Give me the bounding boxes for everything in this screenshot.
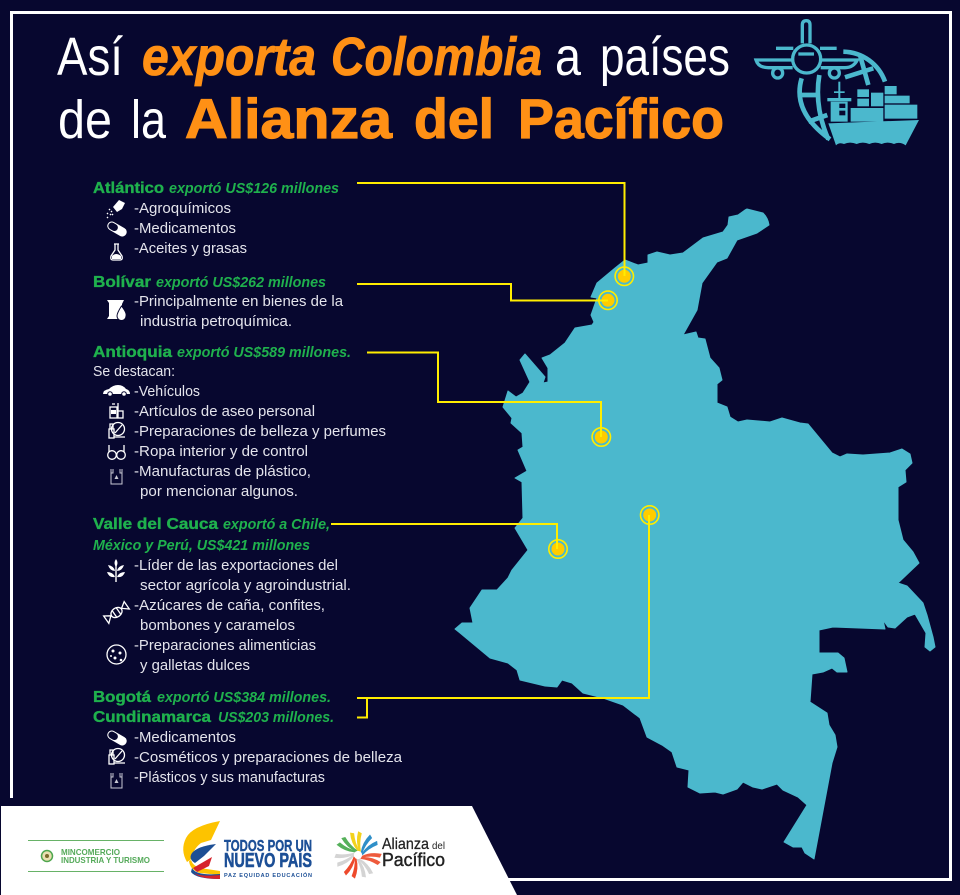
panel: Bogotá and Cundinamarca: Bogotá bbox=[93, 689, 151, 706]
icon: toiletries bbox=[110, 403, 123, 418]
icon: cookie bbox=[107, 645, 126, 664]
title: Pacífico bbox=[518, 87, 724, 150]
panel: Bogotá and Cundinamarca: US$203 millones. bbox=[218, 709, 334, 726]
marker: Bogotá bbox=[640, 506, 659, 524]
logo: Alianza del Pacífico: del bbox=[432, 840, 445, 852]
panel: Atlántico: -Medicamentos bbox=[134, 220, 236, 237]
panel: Bolívar: industria petroquímica. bbox=[140, 313, 292, 330]
panel: Bogotá and Cundinamarca: -Cosméticos y preparaciones de belleza bbox=[134, 749, 403, 766]
panel: Valle del Cauca: bombones y caramelos bbox=[140, 617, 295, 634]
icon: beauty products bbox=[109, 422, 125, 438]
logo: Alianza del Pacífico: Alianza bbox=[382, 836, 429, 853]
panel: Antioquia: -Vehículos bbox=[134, 383, 200, 400]
title: exporta bbox=[142, 27, 316, 87]
panel: Bolívar: -Principalmente en bienes de la bbox=[134, 293, 344, 310]
icon: barrel and drop bbox=[107, 300, 126, 320]
panel: Atlántico: Atlántico bbox=[93, 180, 164, 197]
connector: Bolívar bbox=[357, 284, 608, 300]
icon: car bbox=[103, 385, 130, 396]
footer panel bbox=[1, 806, 517, 895]
icon: plant bbox=[107, 559, 125, 582]
panel: Bolívar: Bolívar bbox=[93, 274, 151, 291]
icon: plane and cargo ship over globe bbox=[756, 21, 919, 145]
title: de bbox=[58, 90, 112, 150]
title: a bbox=[555, 27, 582, 87]
panel: Valle del Cauca bbox=[93, 516, 351, 674]
panel: Antioquia: -Artículos de aseo personal bbox=[134, 403, 315, 420]
icon: candy bbox=[104, 602, 129, 623]
panel: Atlántico: -Agroquímicos bbox=[134, 200, 231, 217]
panel: Antioquia: -Preparaciones de belleza y perfumes bbox=[134, 423, 386, 440]
panel: Valle del Cauca: y galletas dulces bbox=[140, 657, 250, 674]
marker: Atlántico bbox=[615, 267, 634, 285]
title: Así bbox=[57, 27, 123, 87]
panel: Bogotá and Cundinamarca bbox=[93, 689, 403, 788]
panel: Atlántico: -Aceites y grasas bbox=[134, 240, 247, 257]
panel: Antioquia: -Ropa interior y de control bbox=[134, 443, 308, 460]
title: países bbox=[600, 27, 730, 87]
panel: Bogotá and Cundinamarca: Cundinamarca bbox=[93, 709, 211, 726]
panel: Antioquia: -Manufacturas de plástico, bbox=[134, 463, 311, 480]
panel: Bogotá and Cundinamarca: exportó US$384 millones. bbox=[157, 689, 331, 706]
panel: Bolívar: exportó US$262 millones bbox=[156, 274, 326, 291]
title bbox=[57, 27, 730, 150]
panel: Antioquia: por mencionar algunos. bbox=[140, 483, 298, 500]
title: Alianza bbox=[185, 87, 393, 150]
marker: Antioquia bbox=[592, 428, 610, 446]
logo: Todos por un nuevo país bbox=[183, 821, 312, 879]
connector: Antioquia bbox=[367, 352, 601, 437]
panel: Valle del Cauca: -Líder de las exportaciones del bbox=[134, 557, 338, 574]
icon: beauty products bbox=[109, 748, 125, 764]
marker: Valle del Cauca bbox=[549, 540, 567, 558]
panel: Atlántico: exportó US$126 millones bbox=[169, 180, 339, 197]
panel: Atlántico bbox=[93, 180, 339, 260]
icon: oil flask bbox=[111, 244, 122, 260]
panel: Valle del Cauca: exportó a Chile, bbox=[223, 516, 330, 533]
logo: Todos por un nuevo país: PAZ EQUIDAD EDUCACIÓN bbox=[224, 871, 312, 879]
panel: Bogotá and Cundinamarca: -Plásticos y sus manufacturas bbox=[134, 769, 325, 786]
panel: Valle del Cauca: Valle del Cauca bbox=[93, 516, 218, 533]
panel: Valle del Cauca: sector agrícola y agroindustrial. bbox=[140, 577, 351, 594]
title: Colombia bbox=[331, 27, 542, 87]
panel: Antioquia bbox=[93, 344, 386, 500]
panel: Antioquia: Se destacan: bbox=[93, 363, 175, 380]
panel: Antioquia: exportó US$589 millones. bbox=[177, 344, 351, 361]
icon: capsule bbox=[106, 729, 128, 747]
icon: agrochemical spray bbox=[107, 200, 125, 218]
title: la bbox=[131, 90, 167, 150]
connector: Atlántico bbox=[357, 183, 624, 276]
icon: underwear bbox=[108, 445, 125, 459]
icon: plastic bag bbox=[111, 773, 122, 788]
title: del bbox=[414, 87, 494, 150]
connector: Bogotá and Cundinamarca bbox=[357, 515, 649, 718]
panel: Antioquia: Antioquia bbox=[93, 344, 172, 361]
marker: Bolívar bbox=[599, 291, 617, 309]
logo: Mincomercio bbox=[28, 840, 164, 872]
panel: Valle del Cauca: -Azúcares de caña, confites, bbox=[134, 597, 325, 614]
logo: Todos por un nuevo país: TODOS POR UN bbox=[224, 838, 312, 855]
connector: Valle del Cauca bbox=[331, 524, 557, 549]
panel: Valle del Cauca: -Preparaciones alimenticias bbox=[134, 637, 316, 654]
logo: Mincomercio: INDUSTRIA Y TURISMO bbox=[61, 855, 150, 865]
panel: Valle del Cauca: México y Perú, US$421 millones bbox=[93, 537, 310, 554]
logo: Todos por un nuevo país: NUEVO PAÍS bbox=[224, 849, 312, 872]
logo: Alianza del Pacífico bbox=[334, 831, 445, 879]
icon: capsule bbox=[106, 220, 128, 238]
panel: Bolívar bbox=[93, 274, 344, 330]
logo: Alianza del Pacífico: Pacífico bbox=[382, 849, 445, 870]
panel: Bogotá and Cundinamarca: -Medicamentos bbox=[134, 729, 236, 746]
map of Colombia bbox=[455, 209, 935, 859]
icon: plastic bag bbox=[111, 469, 122, 484]
logo: Mincomercio: MINCOMERCIO bbox=[61, 847, 120, 857]
